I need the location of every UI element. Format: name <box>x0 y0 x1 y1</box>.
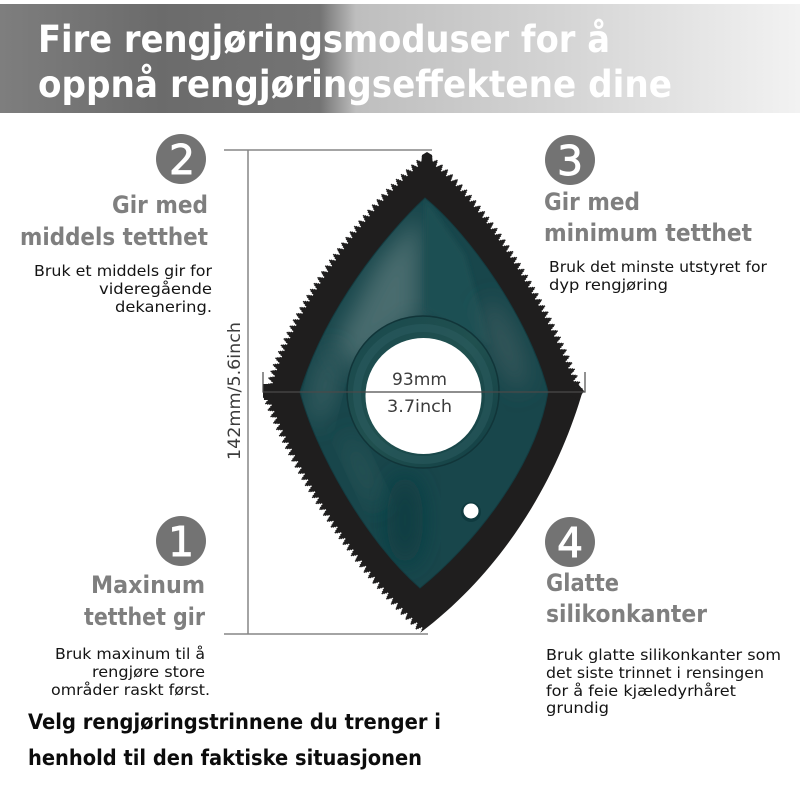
description 2: Bruk et middels gir for <box>34 262 213 280</box>
description 3: Bruk det minste utstyret for <box>549 258 768 276</box>
central ring and hole <box>347 316 499 468</box>
heading 3 <box>544 188 752 247</box>
description 2: dekanering. <box>115 298 212 316</box>
description 1 <box>51 645 210 699</box>
heading 1: tetthet gir <box>84 603 205 631</box>
badge 2 <box>156 134 206 184</box>
badge 3 <box>545 135 595 185</box>
title: oppnå rengjøringseffektene dine <box>38 63 672 106</box>
description 4: for å feie kjæledyrhåret <box>546 682 736 700</box>
description 2 <box>34 262 213 316</box>
title <box>38 18 672 106</box>
heading 1: Maxinum <box>91 571 205 599</box>
heading 2: Gir med <box>112 191 208 219</box>
width dimension: 3.7inch <box>387 397 452 417</box>
description 1: rengjøre store <box>92 663 205 681</box>
badge 4 <box>545 517 595 567</box>
header banner <box>0 4 800 113</box>
heading 2: middels tetthet <box>20 223 208 251</box>
description 4: grundig <box>546 699 609 717</box>
footer note: henhold til den faktiske situasjonen <box>28 746 422 770</box>
footer note <box>28 710 441 770</box>
heading 1 <box>84 571 205 631</box>
footer note: Velg rengjøringstrinnene du trenger i <box>28 710 441 734</box>
description 3 <box>549 258 768 294</box>
description 4 <box>546 646 781 717</box>
title: Fire rengjøringsmoduser for å <box>38 18 610 61</box>
width dimension <box>263 370 585 417</box>
small hanging hole <box>461 502 481 522</box>
heading 2 <box>20 191 208 251</box>
height dimension bracket: 142mm/5.6inch <box>225 322 245 460</box>
product: scraper tool <box>263 152 585 633</box>
badge 1 <box>156 516 206 566</box>
description 4: det siste trinnet i rensingen <box>546 664 764 682</box>
badge 1: 1 <box>168 518 194 566</box>
heading 3: Gir med <box>544 188 640 216</box>
heading 4: Glatte <box>546 569 619 597</box>
badge 4: 4 <box>557 519 583 567</box>
panel: mode 2 <box>20 134 213 316</box>
panel: mode 4 <box>545 517 781 717</box>
height dimension bracket <box>224 150 432 634</box>
description 1: områder raskt først. <box>51 681 210 699</box>
heading 4 <box>546 569 707 628</box>
heading 4: silikonkanter <box>546 600 707 628</box>
description 2: videregående <box>99 280 212 298</box>
panel: mode 3 <box>544 135 768 294</box>
description 4: Bruk glatte silikonkanter som <box>546 646 781 664</box>
description 1: Bruk maxinum til å <box>55 645 205 663</box>
panel: mode 1 <box>51 516 210 699</box>
width dimension: 93mm <box>392 370 447 390</box>
heading 3: minimum tetthet <box>544 219 752 247</box>
green handle <box>300 198 548 588</box>
black blade <box>263 152 584 633</box>
badge 2: 2 <box>169 136 195 184</box>
description 3: dyp rengjøring <box>549 276 668 294</box>
badge 3: 3 <box>557 137 583 185</box>
